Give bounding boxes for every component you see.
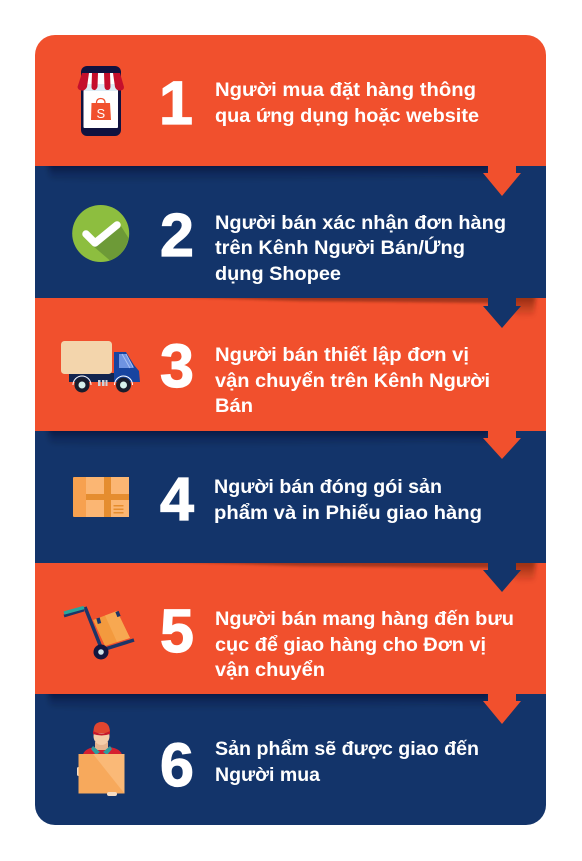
icon: hand truck xyxy=(64,607,134,660)
number 2: 2 xyxy=(160,201,194,269)
text: step 1: Người mua đặt hàng thông xyxy=(215,79,476,101)
icon: phone shop: S xyxy=(96,106,105,121)
text: step 3 xyxy=(215,344,490,417)
text: step 4: Người bán đóng gói sản xyxy=(214,476,442,498)
text: step 4: phẩm và in Phiếu giao hàng xyxy=(214,502,482,524)
text: step 2: dụng Shopee xyxy=(215,263,341,285)
icon: parcel box xyxy=(73,477,129,517)
text: step 6: Người mua xyxy=(215,764,320,786)
text: step 2 xyxy=(215,212,506,285)
icon: phone shop xyxy=(78,66,124,136)
icon: green check xyxy=(72,205,129,262)
text: step 1: qua ứng dụng hoặc website xyxy=(215,105,479,127)
text: step 5 xyxy=(215,608,514,681)
text: step 2: trên Kênh Người Bán/Ứng xyxy=(215,235,465,259)
text: step 1 xyxy=(215,79,479,127)
number 5: 5 xyxy=(160,597,194,665)
text: step 5: Người bán mang hàng đến bưu xyxy=(215,608,514,630)
icon: delivery person xyxy=(77,722,124,796)
text: step 6: Sản phẩm sẽ được giao đến xyxy=(215,738,479,760)
number 6: 6 xyxy=(160,731,194,799)
text: step 6 xyxy=(215,738,479,786)
text: step 5: cục để giao hàng cho Đơn vị xyxy=(215,634,486,656)
text: step 3: Bán xyxy=(215,395,253,417)
arrow 4 xyxy=(483,562,521,592)
number 4: 4 xyxy=(160,465,194,533)
text: step 2: Người bán xác nhận đơn hàng xyxy=(215,212,506,234)
text: step 3: Người bán thiết lập đơn vị xyxy=(215,344,469,366)
number 1: 1 xyxy=(159,69,193,137)
icon: truck xyxy=(61,341,140,392)
arrow 1 xyxy=(483,165,521,196)
text: step 5: vận chuyển xyxy=(215,659,325,681)
text: step 4 xyxy=(214,476,482,524)
arrow 2 xyxy=(483,297,521,328)
text: step 3: vận chuyển trên Kênh Người xyxy=(215,370,490,392)
number 3: 3 xyxy=(160,332,194,400)
arrow 5 xyxy=(483,693,521,724)
arrow 3 xyxy=(483,430,521,459)
